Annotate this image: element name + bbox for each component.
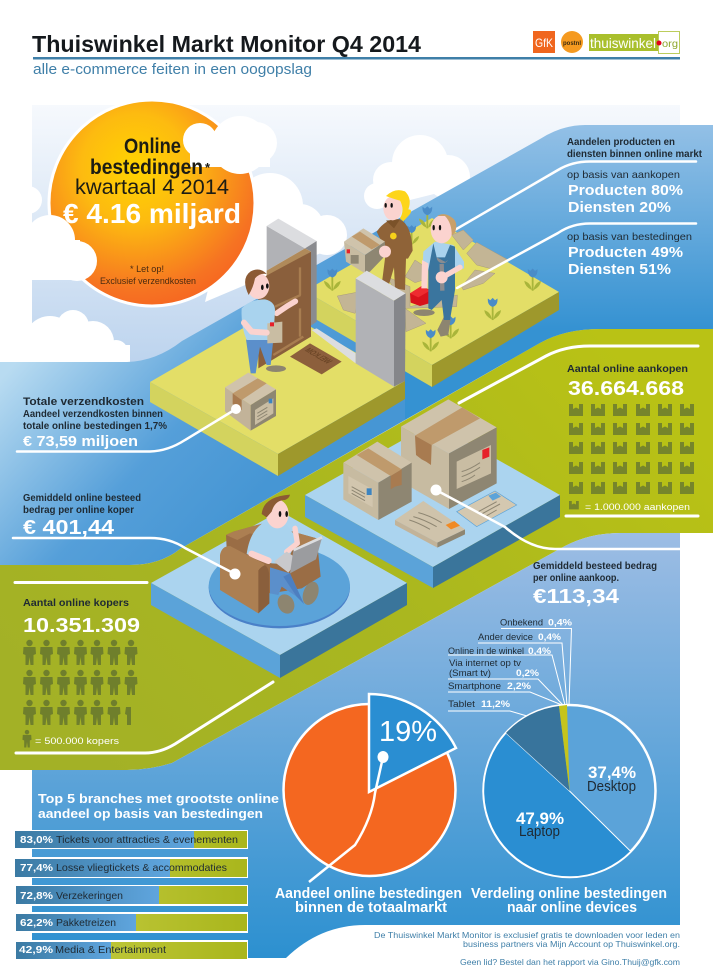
- value: €113,34: [533, 586, 620, 608]
- average per purchase text: [533, 561, 657, 608]
- footer note: [374, 930, 680, 967]
- label: unknown: Onbekend: [500, 618, 543, 628]
- chart caption: market share: Aandeel online bestedingen: [275, 886, 462, 902]
- value: 36.664.668: [568, 378, 684, 400]
- cloud overlapping sun, top right: [183, 116, 277, 174]
- tile: parcels: [305, 423, 560, 588]
- services by purchases: Diensten 20%: [568, 199, 671, 216]
- person: [247, 495, 322, 616]
- flat parcel: [395, 501, 465, 548]
- heading line two: bedrag per online koper: [23, 505, 134, 516]
- top 5 heading: [38, 791, 279, 821]
- leader line: average per purchase: [436, 490, 680, 549]
- bar 1: 83,0%: [20, 834, 54, 846]
- chart caption: devices: [471, 886, 667, 916]
- bar 5: Media & Entertainment: [55, 944, 166, 956]
- divider line: buyers top: [15, 581, 147, 584]
- label: smartphone: [448, 681, 532, 692]
- value laptop: 47,9%: [516, 809, 564, 828]
- leader line: [309, 757, 383, 882]
- bar chart: top 5 branches: [15, 830, 248, 959]
- bar 2: Losse vliegtickets & accommodaties: [56, 862, 227, 874]
- amount: € 4.16 miljard: [63, 198, 241, 229]
- online purchases block: [567, 363, 694, 513]
- legend: = 1.000.000 aankopen: [585, 502, 690, 513]
- logos: [533, 31, 680, 54]
- leader line: purchases count: [459, 346, 698, 403]
- door wall and door: [258, 219, 317, 368]
- lower blue panel: [32, 533, 680, 958]
- divider line: purchases bottom: [566, 514, 698, 518]
- device labels with leader lines: [448, 618, 573, 716]
- label: other device: 0,4%: [538, 632, 562, 643]
- subheading spending: op basis van bestedingen: [567, 231, 692, 243]
- rug: [209, 546, 350, 628]
- parcels: [343, 399, 517, 548]
- welcome mat: WELKOM: [302, 346, 335, 365]
- leader line: spending share: [457, 224, 696, 288]
- bar 2: 77,4%: [20, 862, 54, 874]
- slice: smartphone: [559, 705, 570, 791]
- bar 3: [16, 885, 248, 906]
- pie chart: devices: [484, 705, 656, 877]
- heading: Aantal online aankopen: [567, 363, 688, 375]
- bar 1: Tickets voor attracties & evenementen: [56, 834, 238, 846]
- dot: [378, 751, 388, 763]
- label: tablet: Tablet: [448, 699, 475, 710]
- services by spending: Diensten 51%: [568, 261, 671, 278]
- threshold: [312, 328, 356, 363]
- small parcel: [343, 442, 412, 520]
- cloud overlapping sun, left: [25, 215, 97, 281]
- blue panel top right: [405, 125, 713, 420]
- bar 2: [15, 857, 248, 878]
- label: tablet: 11,2%: [481, 699, 511, 710]
- products by spending: Producten 49%: [568, 244, 683, 261]
- label desktop: Desktop: [587, 778, 636, 795]
- logo: GfK: [533, 31, 555, 53]
- subheading purchases: op basis van aankopen: [567, 169, 680, 181]
- description: Aandeel verzendkosten binnen: [23, 409, 163, 420]
- chart caption: devices: Verdeling online bestedingen: [471, 886, 667, 902]
- leader line: average per buyer: [13, 538, 235, 574]
- footer note: business partners via Mijn Account op Thuiswinkel.org.: [463, 939, 680, 949]
- tile: doorstep: [150, 308, 405, 476]
- online shopper in armchair: [209, 495, 350, 628]
- label: in store: 0,4%: [528, 646, 552, 657]
- doorway scene: [225, 219, 406, 431]
- value: 19%: [379, 716, 437, 748]
- bar 4: [16, 912, 248, 933]
- large parcel: [401, 399, 497, 509]
- header: [32, 31, 680, 78]
- laptop: [274, 536, 323, 573]
- character: delivery woman: [344, 190, 413, 290]
- slice: laptop: [484, 733, 631, 877]
- heading: Totale verzendkosten: [23, 396, 144, 408]
- footer note: De Thuiswinkel Markt Monitor is exclusief gratis te downloaden voor leden en: [374, 930, 680, 940]
- dot: [230, 568, 240, 580]
- chart caption: market share: [275, 886, 462, 916]
- heading: Gemiddeld online besteed: [23, 493, 141, 504]
- online buyers block: [22, 597, 140, 748]
- footnote: * Let op!: [130, 264, 164, 275]
- chart caption: devices: naar online devices: [507, 900, 637, 916]
- label: smartphone: Smartphone: [448, 681, 501, 692]
- value: 10.351.309: [23, 615, 140, 637]
- heading line two: diensten binnen online markt: [567, 149, 703, 160]
- title: Thuiswinkel Markt Monitor Q4 2014: [32, 31, 421, 57]
- welcome mat: [290, 343, 342, 374]
- envelope: [457, 491, 517, 527]
- value: € 401,44: [23, 517, 115, 539]
- tile: garden: [305, 218, 559, 387]
- dot: [430, 484, 442, 496]
- label: smart tv: 0,2%: [516, 668, 540, 679]
- bar 4: Pakketreizen: [56, 917, 116, 929]
- legend: = 500.000 kopers: [35, 736, 119, 747]
- tile: armchair: [151, 511, 407, 678]
- sun heading: Online: [124, 135, 181, 158]
- dot: [231, 404, 241, 414]
- label: other device: [478, 632, 562, 643]
- bar 3: 72,8%: [20, 890, 54, 902]
- label: other device: Ander device: [478, 632, 533, 643]
- sky background: [32, 105, 680, 362]
- bar 4: 62,2%: [20, 917, 54, 929]
- logo: Thuiswinkel.org: org: [662, 39, 678, 50]
- label: smart tv: [449, 658, 540, 679]
- blue band left: [0, 215, 405, 565]
- value: € 73,59 miljoen: [23, 433, 138, 450]
- top 5 heading: Top 5 branches met grootste online: [38, 791, 279, 806]
- pictogram: buyers: [22, 640, 138, 748]
- heading: Gemiddeld besteed bedrag: [533, 561, 657, 572]
- heading: Aantal online kopers: [23, 597, 129, 609]
- footer note: Geen lid? Bestel dan het rapport via Gino.Thuij@gfk.com: [460, 957, 680, 967]
- olive band: [0, 329, 713, 770]
- average per buyer text: [23, 493, 141, 539]
- leader line: purchases share: [410, 162, 696, 256]
- wall: [356, 271, 406, 387]
- asterisk: *: [205, 160, 211, 175]
- callout text: shares products and services: [567, 137, 703, 278]
- character: man at door: [242, 270, 295, 373]
- sun heading line two: bestedingen: [90, 156, 203, 179]
- stones: [337, 230, 508, 332]
- leader line: shipping costs: [17, 409, 236, 452]
- label: in store: Online in de winkel: [448, 646, 524, 657]
- label: smart tv: (Smart tv): [449, 668, 491, 679]
- description line two: totale online bestedingen 1,7%: [23, 421, 167, 432]
- tulips: [324, 206, 541, 351]
- bar 1: [15, 830, 248, 849]
- shipping costs text: [23, 396, 167, 450]
- character: mechanic: [410, 214, 464, 337]
- parcel on doorstep: [225, 373, 276, 431]
- leader lines: [448, 628, 572, 716]
- logo: Thuiswinkel.org: [589, 32, 680, 54]
- armchair front arm: [220, 546, 269, 613]
- label: unknown: 0,4%: [548, 618, 573, 628]
- chart caption: market share: binnen de totaalmarkt: [295, 900, 447, 916]
- logo: PostNL: postnl: [563, 41, 581, 47]
- period: kwartaal 4 2014: [75, 176, 229, 199]
- bar 5: 42,9%: [19, 944, 54, 956]
- pie chart: online share of total market: [284, 694, 456, 882]
- label: smart tv: Via internet op tv: [449, 658, 521, 669]
- subtitle: alle e-commerce feiten in een oogopslag: [33, 61, 312, 78]
- heading line two: per online aankoop.: [533, 573, 619, 584]
- leader line: buyers bottom: [16, 682, 273, 753]
- wedge 19 percent: [369, 694, 456, 792]
- slice: tablet: [506, 706, 570, 791]
- garden stones and characters: [324, 190, 541, 351]
- logo: Thuiswinkel.org: thuiswinkel: [590, 35, 656, 51]
- logo: GfK: GfK: [535, 36, 553, 50]
- clouds behind the scene: [14, 135, 470, 368]
- top 5 heading: aandeel op basis van bestedingen: [38, 806, 263, 821]
- pictogram: parcels: [569, 404, 694, 509]
- bar 5: [16, 940, 248, 959]
- orange sun badge: [25, 100, 277, 306]
- heading: Aandelen producten en: [567, 137, 675, 148]
- bar 3: Verzekeringen: [56, 890, 123, 902]
- footnote line two: Exclusief verzendkosten: [100, 276, 196, 287]
- label: unknown: [500, 618, 573, 628]
- armchair back: [226, 523, 321, 593]
- label: smartphone: 2,2%: [507, 681, 532, 692]
- label laptop: Laptop: [519, 823, 560, 840]
- value desktop: 37,4%: [588, 763, 636, 782]
- products by purchases: Producten 80%: [568, 182, 683, 199]
- label: tablet: [448, 699, 511, 710]
- logo: PostNL: [561, 31, 583, 53]
